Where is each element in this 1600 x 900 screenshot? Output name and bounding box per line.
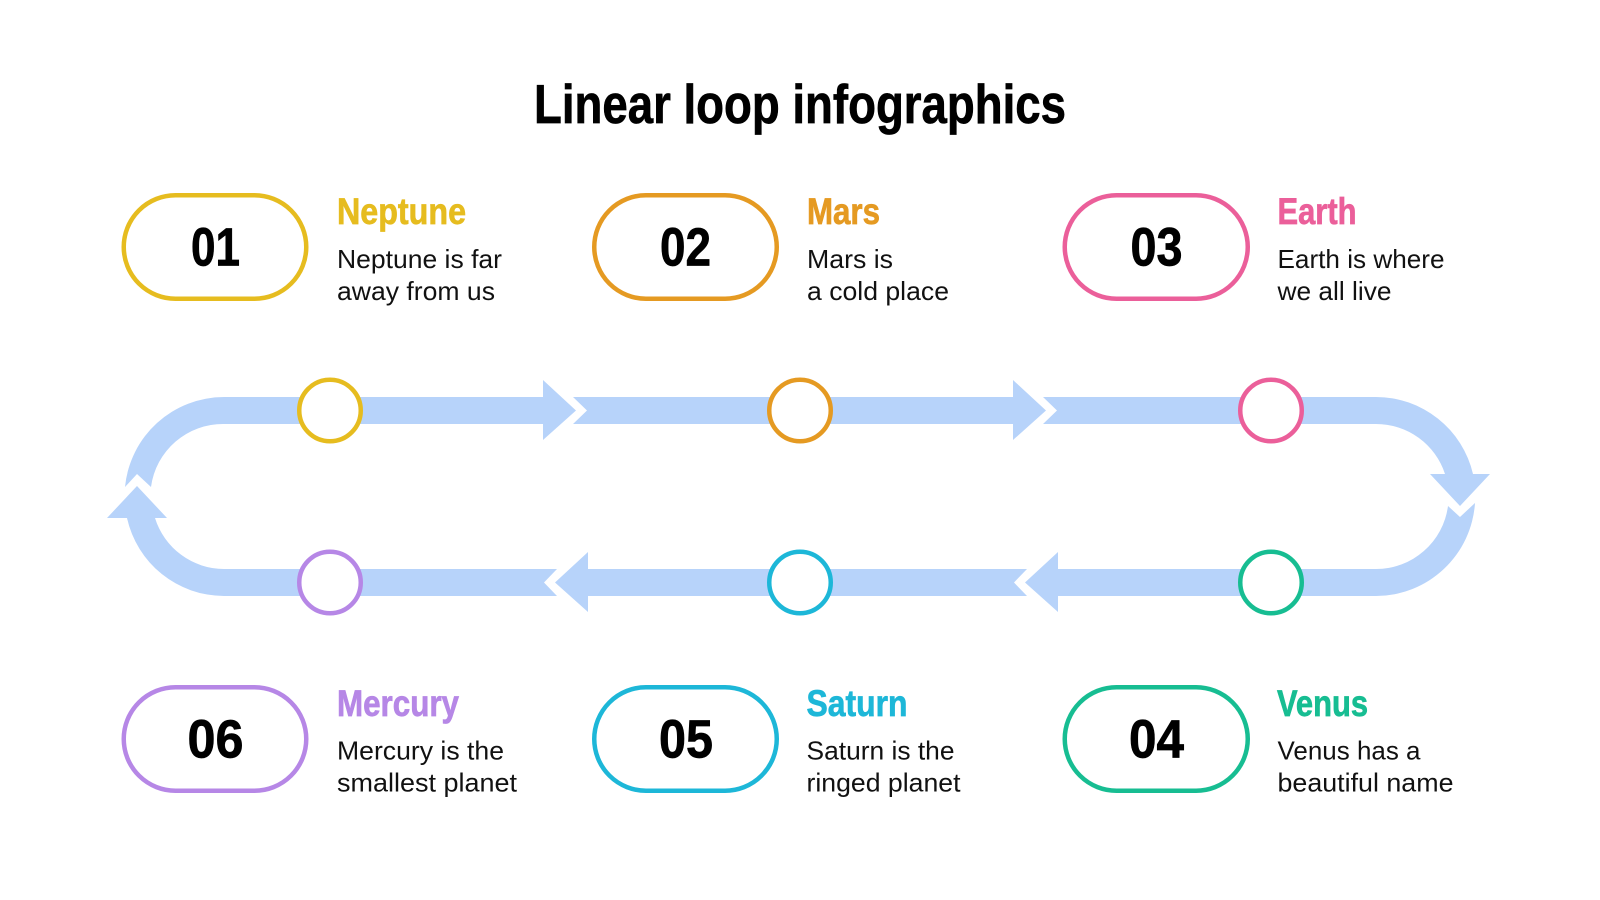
heading: Earth: Earth	[1278, 191, 1356, 232]
description: Venus: beautiful name	[1278, 768, 1454, 798]
description: Saturn	[806, 736, 961, 798]
description: Earth: Earth is where	[1278, 244, 1444, 274]
description: Mars: a cold place	[807, 276, 949, 306]
description: Saturn: Saturn is the	[806, 736, 954, 766]
description: Mars: Mars is	[807, 244, 893, 274]
number pill 06: 06	[188, 710, 244, 770]
node: orange	[769, 380, 831, 441]
heading: Saturn: Saturn	[806, 683, 908, 724]
panel: 03 Earth	[1065, 191, 1444, 306]
arrow: top left curve into first top arrow	[125, 380, 576, 487]
description: Neptune: away from us	[337, 276, 495, 306]
heading: Mercury: Mercury	[337, 683, 459, 724]
heading: Mars: Mars	[807, 191, 880, 232]
number pill 04: 04	[1129, 710, 1184, 770]
panel: 05 Saturn	[594, 683, 961, 798]
heading: Neptune: Neptune	[337, 191, 466, 232]
number pill 04	[1065, 687, 1248, 791]
description: Neptune	[337, 244, 502, 306]
number pill 05: 05	[659, 710, 713, 770]
arrow: bottom middle	[555, 552, 1027, 612]
number pill 03	[1065, 195, 1248, 299]
number pill 05	[594, 687, 777, 791]
number pill 01	[124, 195, 306, 299]
description: Mars	[807, 244, 949, 306]
number pill 02: 02	[660, 218, 711, 278]
panel: 02 Mars	[594, 191, 949, 306]
description: Earth: we all live	[1276, 276, 1392, 306]
number pill 01: 01	[191, 218, 240, 278]
description: Venus: Venus has a	[1278, 736, 1421, 766]
panel: 04 Venus	[1065, 683, 1454, 798]
number pill 06	[124, 687, 306, 791]
node: purple	[299, 552, 361, 613]
description: Neptune: Neptune is far	[337, 244, 502, 274]
arrow: top middle	[573, 380, 1046, 440]
node: green	[1240, 552, 1302, 613]
description: Mercury: smallest planet	[337, 768, 518, 798]
arrow: bottom left curve pointing up	[107, 486, 557, 596]
arrow: bottom right curve into bottom arrow	[1025, 503, 1475, 612]
node: yellow	[299, 380, 361, 441]
number pill 03: 03	[1130, 218, 1182, 278]
panel: 06 Mercury	[124, 683, 518, 798]
number pill 02	[594, 195, 777, 299]
node: pink	[1240, 380, 1302, 441]
heading: Venus: Venus	[1277, 683, 1368, 724]
description: Earth	[1276, 244, 1444, 306]
description: Venus	[1278, 736, 1454, 798]
description: Mercury: Mercury is the	[337, 736, 504, 766]
description: Saturn: ringed planet	[806, 768, 961, 798]
loop diagram	[107, 380, 1490, 613]
arrow: top right curve pointing down	[1043, 397, 1490, 506]
description: Mercury	[337, 736, 518, 798]
title: Linear loop infographics	[534, 73, 1066, 135]
node: cyan	[769, 552, 831, 613]
panel: 01 Neptune	[124, 191, 502, 306]
